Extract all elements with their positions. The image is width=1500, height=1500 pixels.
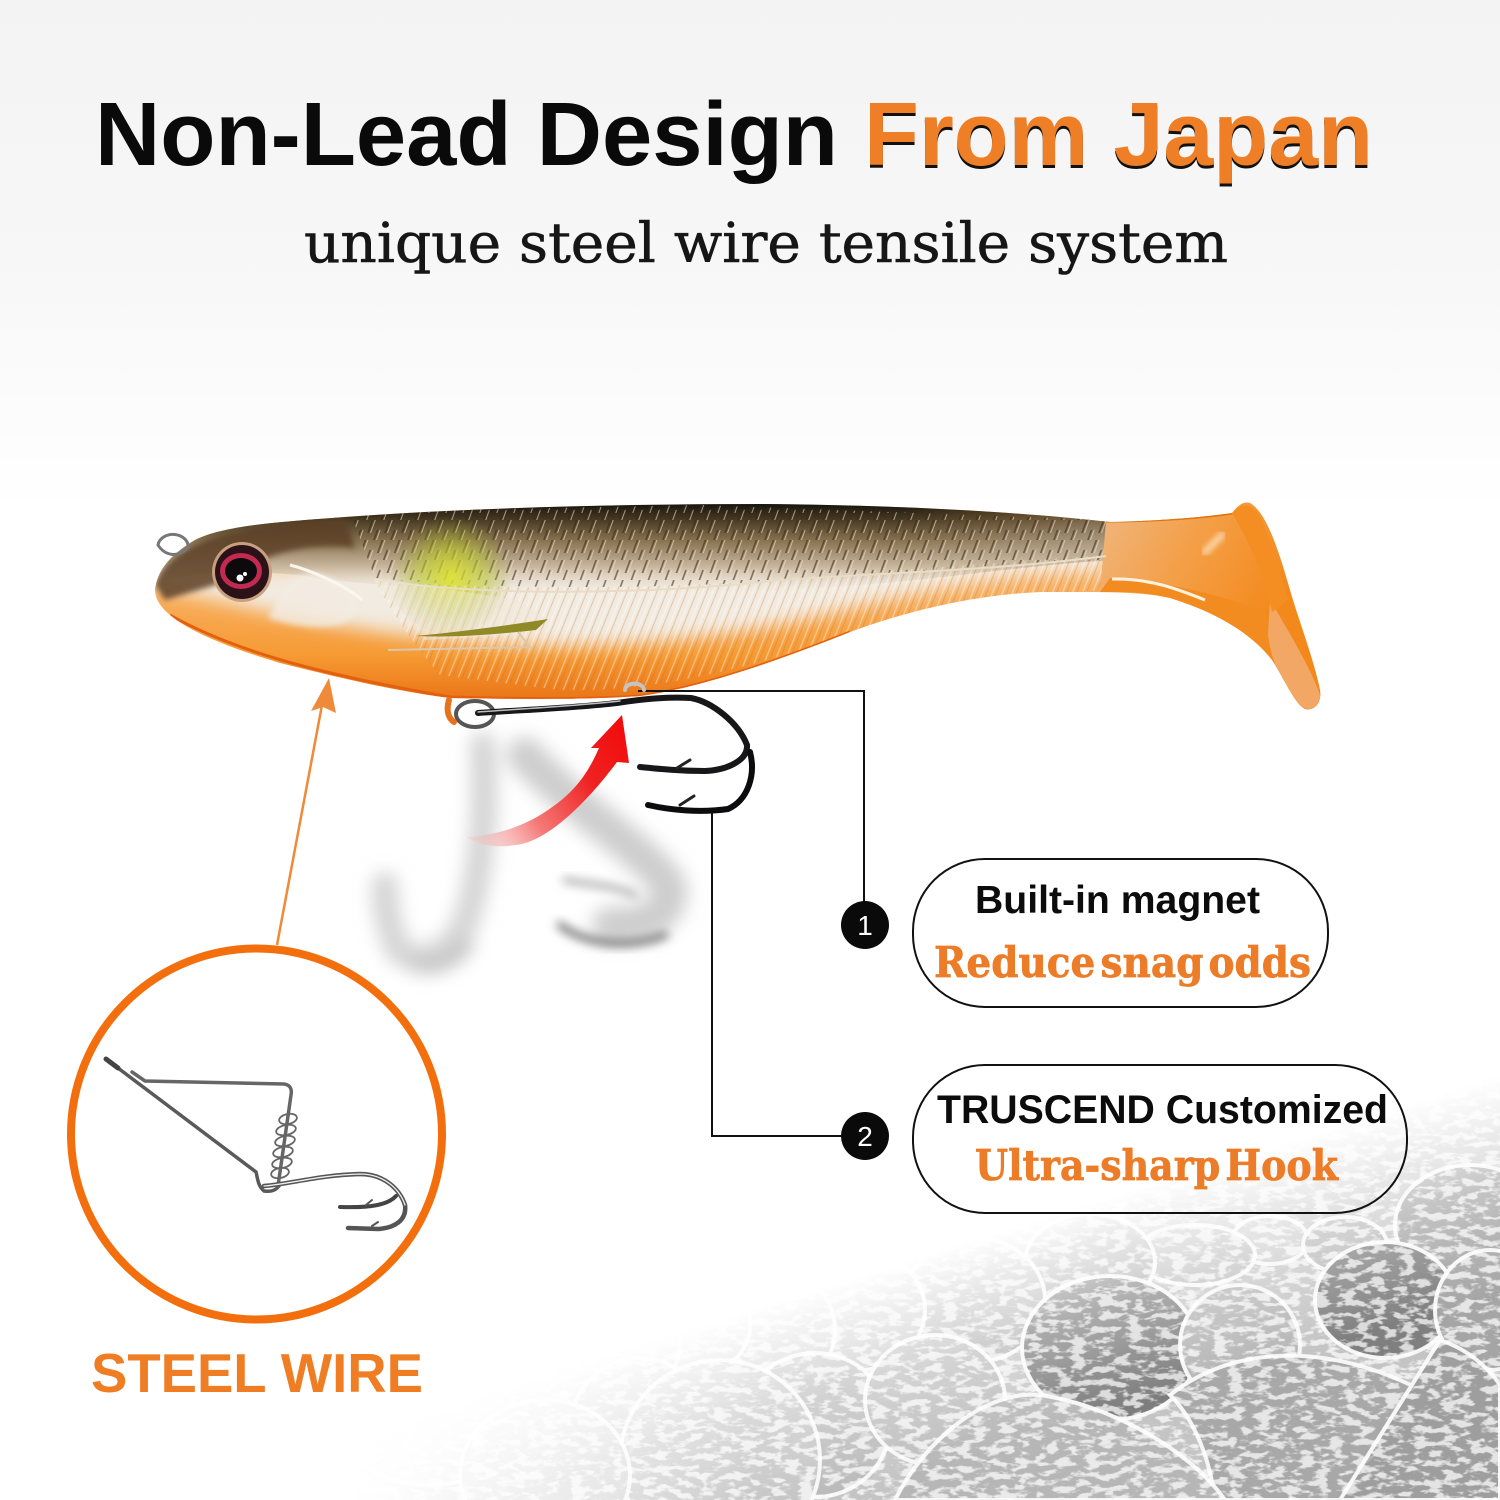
scale texture xyxy=(350,505,1106,587)
callout pill 1 xyxy=(913,859,1328,1007)
dark back xyxy=(156,504,1115,586)
connector line 2 xyxy=(712,810,845,1136)
number badge 1 xyxy=(841,901,889,949)
lure fish body xyxy=(155,502,1320,710)
title xyxy=(95,85,1373,188)
pale belly band xyxy=(150,520,1110,646)
title: orange part: From Japan xyxy=(864,88,1373,188)
pectoral fin xyxy=(373,578,548,650)
lateral line xyxy=(370,556,1106,592)
callout pill 2 xyxy=(913,1065,1407,1213)
background: grey river stones xyxy=(451,1099,1500,1500)
hook eye ring xyxy=(456,701,494,727)
blurred ghost hook xyxy=(385,745,669,967)
brown head top xyxy=(155,517,355,600)
hook barbs xyxy=(677,760,694,805)
thin orange arrow xyxy=(277,678,336,945)
eye xyxy=(212,542,272,602)
connector line 1 xyxy=(638,691,864,905)
head gill plate xyxy=(268,573,358,627)
title: black part: Non-Lead Design xyxy=(95,85,838,185)
reduce snag odds text: Reduce snag odds xyxy=(934,938,1311,987)
steel wire spring illustration xyxy=(106,1059,405,1229)
treble hook xyxy=(448,684,752,811)
TRUSCEND customized text: TRUSCEND Customized xyxy=(937,1088,1388,1132)
number badge 2 xyxy=(841,1112,889,1160)
lower edge rim xyxy=(170,615,850,699)
tail fin rim xyxy=(1232,506,1276,612)
tail highlight xyxy=(1112,579,1205,600)
title: orange part: From Japan xyxy=(864,85,1373,185)
steel wire circle callout xyxy=(71,948,442,1320)
nose ring xyxy=(158,534,188,554)
hook shank and bends xyxy=(478,698,747,771)
belly ray texture xyxy=(375,555,1106,690)
subtitle: unique steel wire tensile system xyxy=(304,211,1228,275)
red curved arrow xyxy=(466,715,629,846)
number badge 1: 1 xyxy=(857,910,873,941)
base orange xyxy=(155,502,1320,710)
number badge 2: 2 xyxy=(857,1121,873,1152)
tail xyxy=(1100,502,1320,709)
steel wire label: STEEL WIRE xyxy=(91,1342,423,1404)
built-in magnet text: Built-in magnet xyxy=(975,879,1260,922)
ultra-sharp hook text: Ultra-sharp Hook xyxy=(975,1141,1339,1190)
tail edges xyxy=(1100,578,1280,660)
green flank patch xyxy=(392,520,510,633)
tail lobe fold xyxy=(1268,600,1320,709)
